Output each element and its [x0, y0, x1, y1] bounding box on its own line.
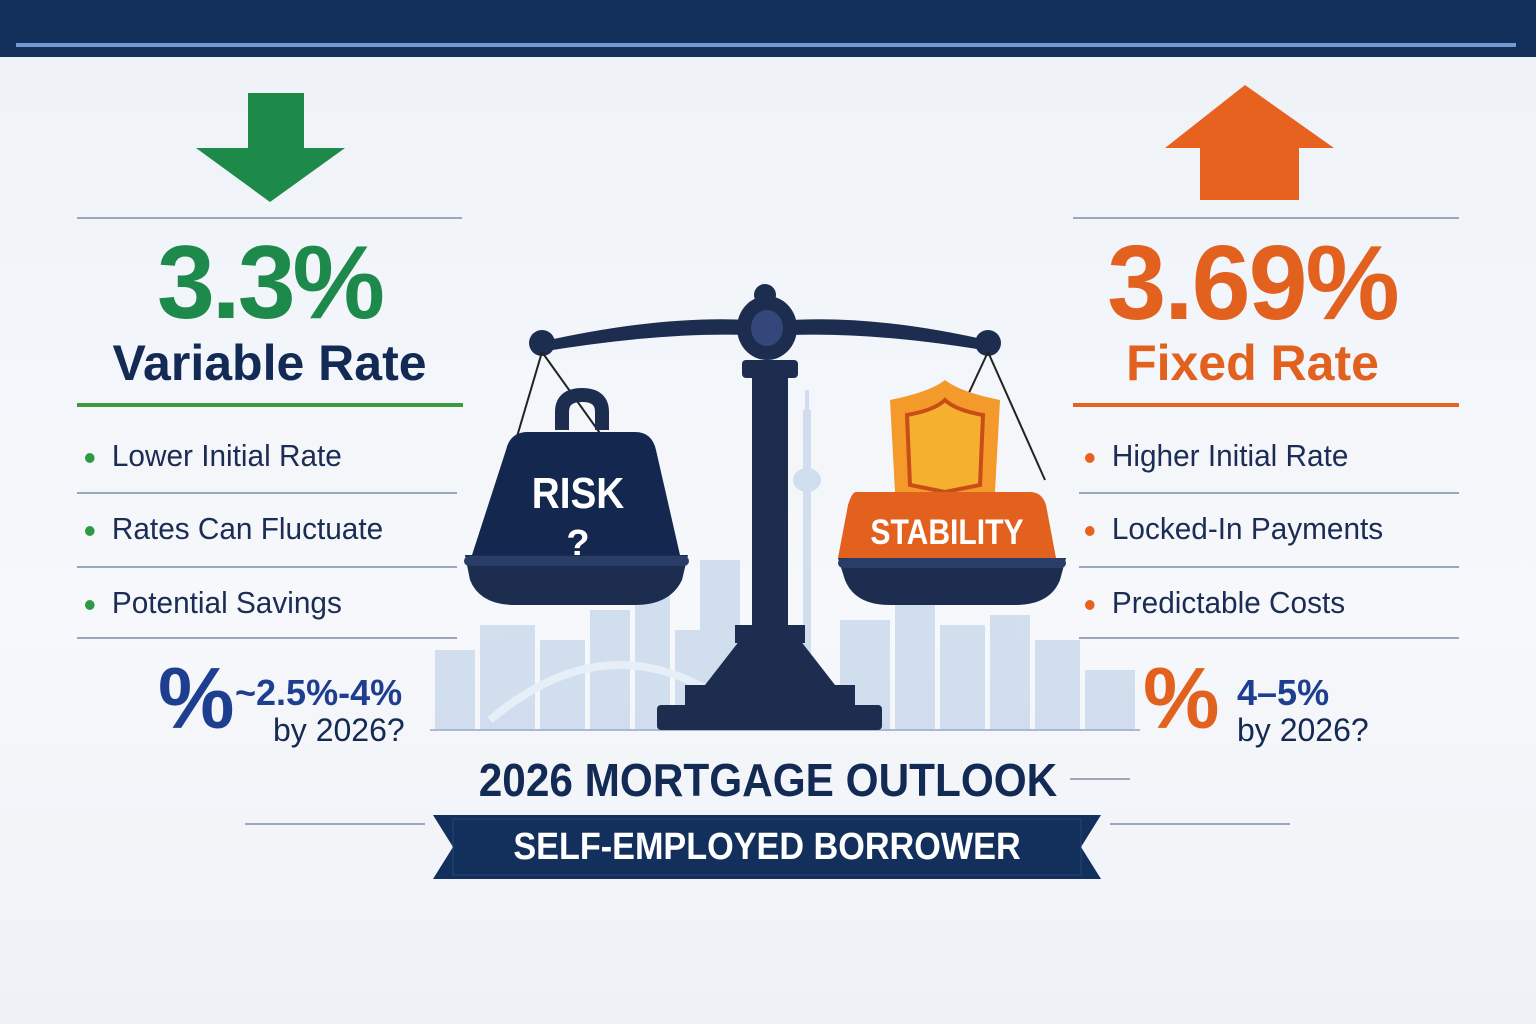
fixed forecast: 4–5% [1237, 672, 1329, 713]
fixed forecast [1143, 651, 1369, 748]
risk weight: RISK [532, 468, 624, 518]
icon: orange up arrow [1165, 85, 1334, 200]
variable bullets [77, 438, 457, 639]
fixed bullets: Locked-In Payments [1112, 511, 1383, 546]
variable forecast: ~2.5%-4% [235, 672, 402, 713]
base and pillar [529, 284, 1001, 730]
fixed forecast: % [1143, 651, 1219, 747]
variable rate heading: Variable Rate [112, 335, 427, 391]
subtitle ribbon: SELF-EMPLOYED BORROWER [513, 826, 1021, 868]
fixed bullets [1079, 438, 1459, 639]
stability block [838, 380, 1066, 605]
variable bullets: Lower Initial Rate [112, 438, 342, 473]
fixed forecast: by 2026? [1237, 712, 1369, 748]
fixed bullets: Predictable Costs [1112, 585, 1345, 620]
variable forecast [158, 651, 405, 748]
subtitle ribbon [433, 815, 1101, 879]
variable forecast: by 2026? [273, 712, 405, 748]
skyline [435, 390, 1135, 730]
icon: green down arrow [196, 93, 345, 202]
variable bullets: Potential Savings [112, 585, 342, 620]
variable forecast: % [158, 651, 234, 747]
stability block: STABILITY [870, 512, 1024, 552]
title: 2026 MORTGAGE OUTLOOK [479, 754, 1057, 806]
variable bullets: Rates Can Fluctuate [112, 511, 383, 546]
fixed bullets: Higher Initial Rate [1112, 438, 1348, 473]
scale illustration with skyline [430, 284, 1140, 731]
ropes [482, 352, 1045, 555]
fixed rate value: 3.69% [1107, 224, 1398, 342]
fixed rate heading: Fixed Rate [1126, 335, 1379, 391]
variable rate value: 3.3% [157, 225, 382, 341]
risk weight [464, 395, 689, 605]
risk weight: ? [566, 523, 590, 565]
top banner [0, 0, 1536, 57]
